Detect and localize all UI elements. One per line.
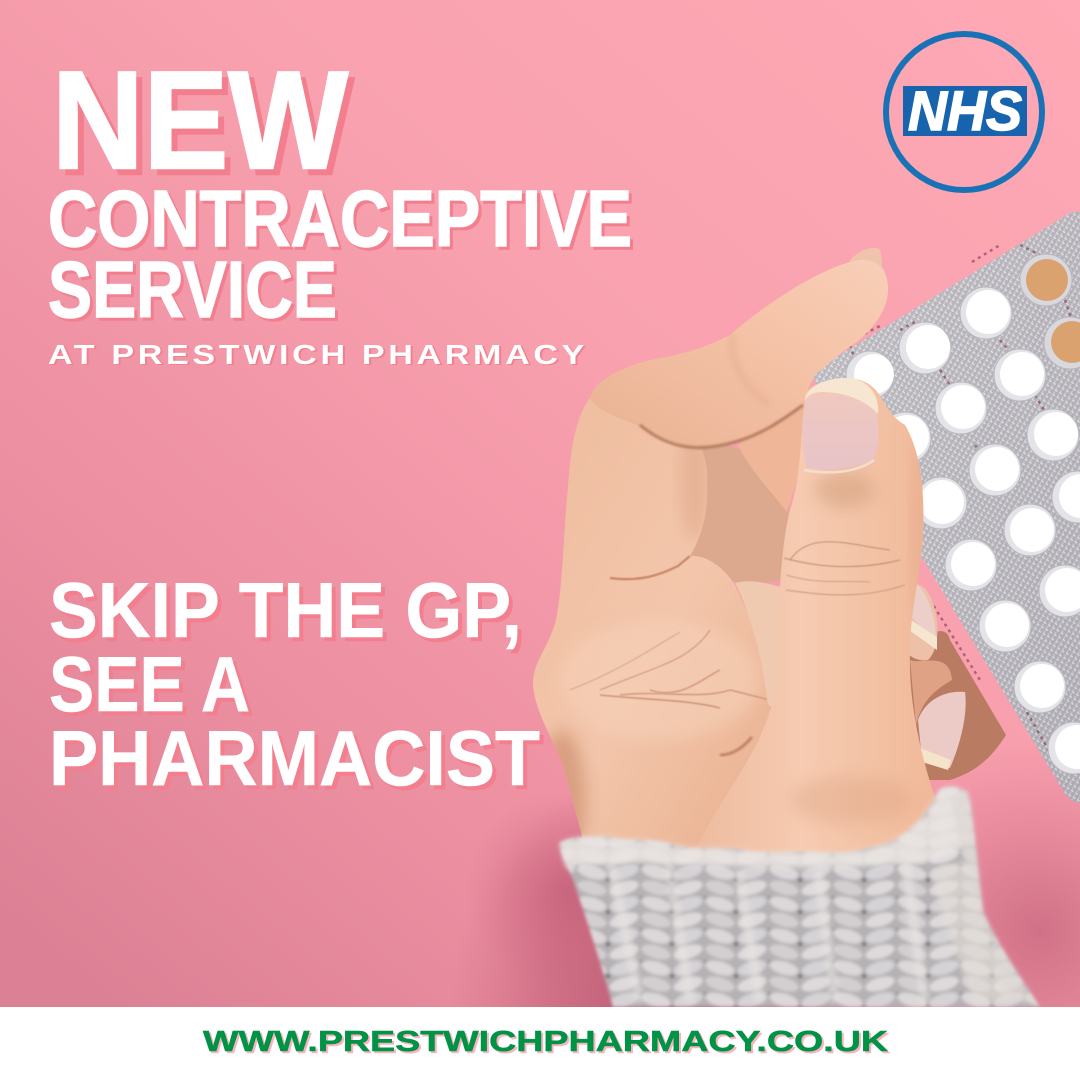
tagline: see a: SEE A (49, 640, 250, 728)
index finger (590, 248, 888, 448)
NHS logo: NHS (908, 79, 1022, 142)
curled fingers (685, 405, 806, 710)
blister pack of pills (813, 212, 1080, 803)
headline: SERVICE: SERVICE (48, 245, 337, 334)
hand holding the pack (533, 248, 1006, 870)
foil print marks (850, 245, 1072, 770)
sweater cuff (560, 787, 1040, 1007)
headline: CONTRACEPTIVE: CONTRACEPTIVE (48, 174, 632, 263)
thumbnail (802, 394, 878, 469)
palm and fist (533, 398, 770, 850)
tagline: skip the GP: SKIP THE GP, (49, 566, 522, 654)
headline: NEW: NEW (52, 43, 349, 198)
footer band (0, 1007, 1080, 1080)
subheading: at Prestwich Pharmacy: AT PRESTWICH PHARMACY (48, 339, 588, 370)
pills (846, 254, 1080, 774)
back palm and fingers (905, 582, 1006, 780)
tagline: pharmacist: PHARMACIST (49, 714, 540, 802)
index fingernail (848, 248, 882, 268)
website address: WWW.PRESTWICHPHARMACY.CO.UK (203, 1026, 888, 1058)
thumb (690, 378, 940, 860)
NHS logo (886, 34, 1042, 190)
